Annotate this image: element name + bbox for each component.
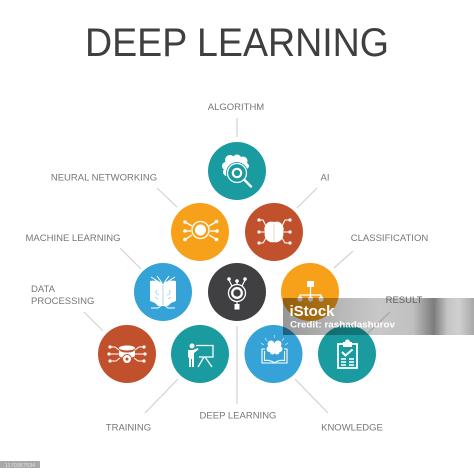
node: neural networking [171,203,229,261]
watermark credit: Credit: rashadashurov [290,320,396,330]
label: deep learning: DEEP LEARNING [200,410,276,422]
label: data processing: PROCESSING [31,296,94,307]
icon: clipboard with check [338,340,357,368]
node: deep learning [208,263,266,321]
icon: hierarchy [297,281,324,302]
node: machine learning [134,263,192,321]
label: knowledge: KNOWLEDGE [321,422,383,434]
label: classification: CLASSIFICATION [351,233,428,244]
icon: circuit brain [257,218,292,245]
node: result [318,325,376,383]
node: knowledge [244,325,302,383]
icon: book with brain [261,335,288,363]
icon: database with gear [107,345,147,364]
icon: book with brain [150,276,176,308]
label: machine learning: MACHINE LEARNING [25,233,121,244]
connector lines [84,118,390,413]
title: DEEP LEARNING [85,21,389,65]
icon: teacher at board [188,344,213,367]
node: training [171,325,229,383]
label: result: RESULT [386,295,423,306]
node: classification [281,263,339,321]
label: ai: AI [321,172,329,184]
image id tag [0,461,40,469]
label: neural networking: NEURAL NETWORKING [51,172,157,184]
icon: gear with nodes [227,277,247,310]
watermark logo: iStock [290,303,335,320]
icon: neural chip [183,220,219,241]
node: ai [245,203,303,261]
label: data processing: DATA [31,284,56,295]
node: algorithm [208,142,266,200]
watermark band [283,295,474,335]
icon: brain with magnifier [222,154,251,186]
node: data processing [98,325,156,383]
label: algorithm: ALGORITHM [208,102,264,113]
label: training: TRAINING [106,422,151,434]
image id tag: 1170957534 [5,463,35,469]
